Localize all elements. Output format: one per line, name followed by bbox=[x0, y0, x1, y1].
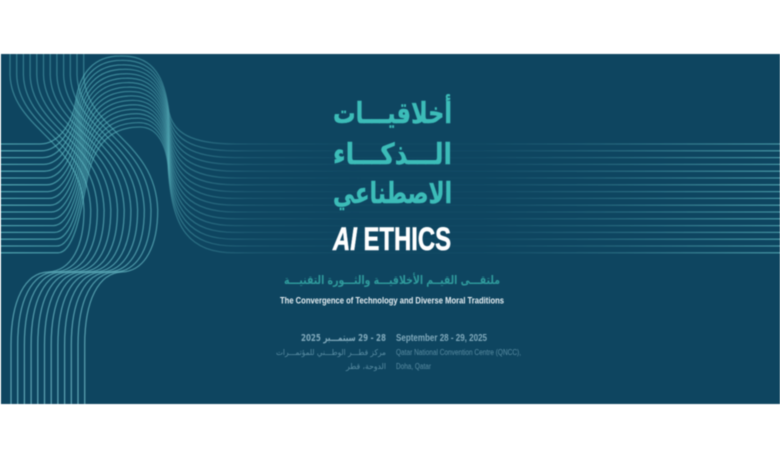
title: AI ETHICS: AI ETHICS bbox=[332, 221, 451, 257]
date: Arabic: 28 - 29 سبتمـــبر 2025 bbox=[301, 333, 386, 344]
event details: English bbox=[396, 333, 521, 371]
wave lines: vertical family bbox=[10, 54, 158, 404]
title line 2: الـــذكـــاء bbox=[333, 137, 452, 171]
title line 1: أخلاقيـــات bbox=[333, 94, 452, 130]
panel: background bbox=[1, 54, 780, 404]
subtitle: English: The Convergence of Technology and Diverse Moral Traditions bbox=[280, 296, 504, 306]
date: English: September 28 - 29, 2025 bbox=[396, 333, 487, 344]
venue: English: Qatar National Convention Centre (QNCC), bbox=[396, 348, 521, 357]
title: Arabic three lines bbox=[333, 94, 452, 210]
city: English: Doha, Qatar bbox=[396, 362, 431, 371]
city: Arabic: الدوحة، قطر bbox=[345, 362, 386, 371]
event details: Arabic bbox=[276, 333, 386, 371]
wave lines: horizontal family bbox=[1, 56, 780, 253]
subtitle: Arabic: ملتقـــى القيــم الأخلاقيـــة والثـــورة التقنيـــة bbox=[284, 272, 500, 288]
title line 3: الاصطناعي bbox=[333, 176, 452, 210]
venue: Arabic: مركز قطـــر الوطـــني للمؤتمـــرات bbox=[276, 348, 386, 357]
